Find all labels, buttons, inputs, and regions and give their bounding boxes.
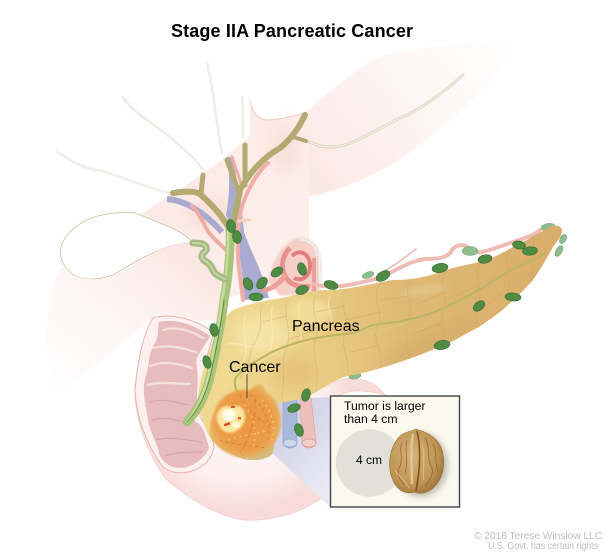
inset caption: than 4 cm xyxy=(344,412,398,426)
stomach pale body xyxy=(47,243,230,395)
gallbladder outline xyxy=(60,213,193,279)
duodenum lumen xyxy=(144,321,210,468)
title: Stage IIA Pancreatic Cancer xyxy=(171,21,413,41)
portal vein xyxy=(167,157,269,300)
pancreatic duct xyxy=(235,253,546,392)
hepatic arteries xyxy=(192,157,268,300)
copyright xyxy=(474,531,602,552)
large pink curve below pancreas xyxy=(135,379,385,520)
liver and hepatic region xyxy=(140,100,316,300)
faded ducts in the liver xyxy=(57,63,463,193)
cone from tumor to inset box xyxy=(272,397,331,508)
celiac artery knot xyxy=(262,238,321,296)
pancreas lobules xyxy=(240,238,535,398)
aorta stub xyxy=(300,398,316,448)
inset caption: Tumor is larger xyxy=(344,399,426,413)
lymph nodes xyxy=(201,219,538,438)
pancreas xyxy=(198,226,562,465)
label: cancer xyxy=(229,359,281,398)
splenic artery xyxy=(312,230,540,287)
vena cava stub xyxy=(283,398,297,448)
copyright: U.S. Govt. has certain rights xyxy=(488,541,598,552)
tumor xyxy=(210,385,281,457)
4 cm reference circle: 4 cm xyxy=(356,453,382,467)
faded liver lobe upper right xyxy=(300,41,514,200)
lymph nodes behind pancreas xyxy=(349,222,568,380)
tumor core xyxy=(217,406,245,433)
label: pancreas: Pancreas xyxy=(292,318,360,335)
pancreas shading xyxy=(209,284,468,460)
cystic duct xyxy=(193,243,225,279)
icon: walnut xyxy=(390,429,448,497)
duodenum xyxy=(135,316,214,473)
copyright: © 2018 Terese Winslow LLC xyxy=(474,531,602,542)
label: cancer: Cancer xyxy=(229,359,281,376)
bile duct xyxy=(187,225,230,422)
inset box: tumor size xyxy=(330,396,460,507)
hepatic bile ducts xyxy=(173,115,306,230)
